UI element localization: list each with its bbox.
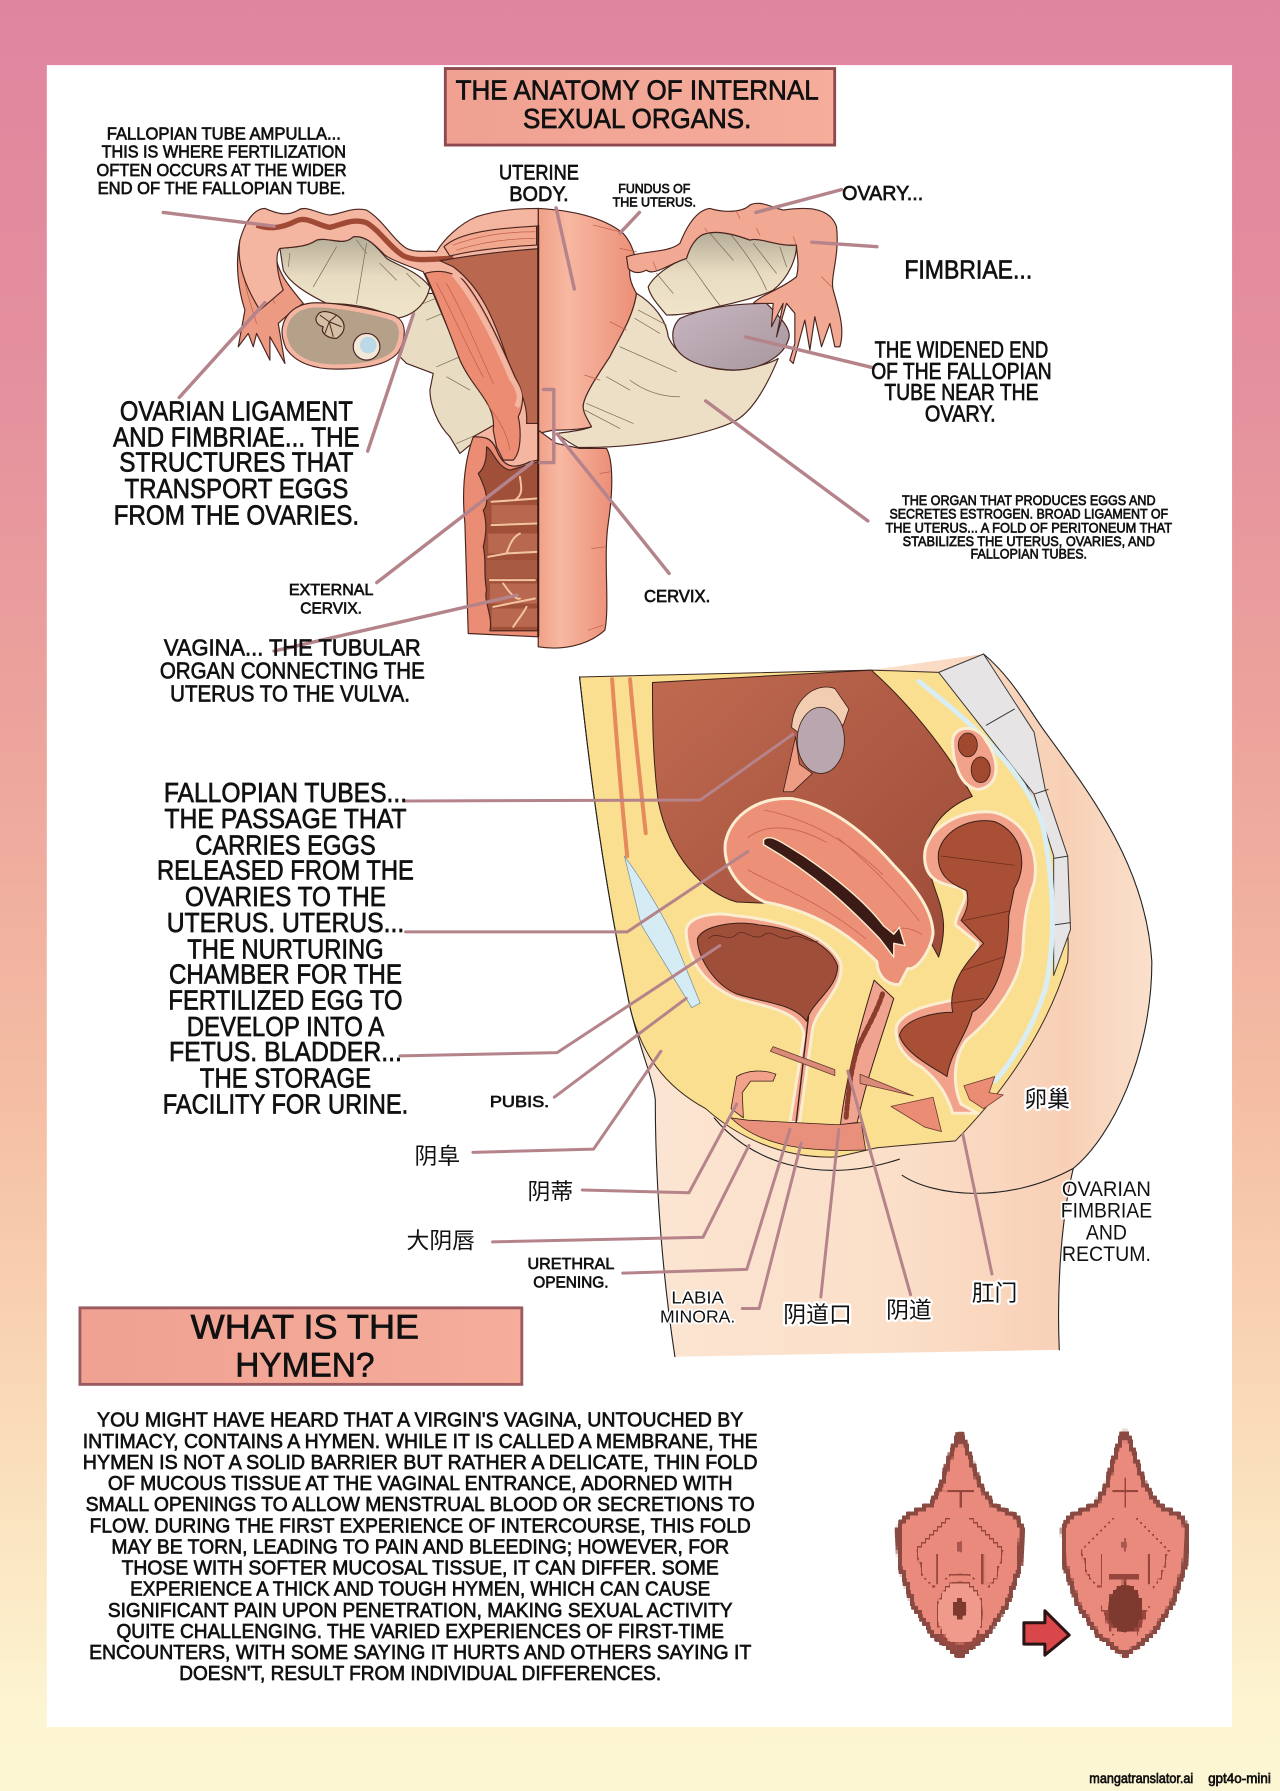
intestine loop <box>953 728 996 789</box>
label: urethral opening: URETHRAL <box>528 1256 614 1273</box>
pale membrane band <box>919 682 1052 1081</box>
label: ovarian fimbriae and rectum <box>1061 1176 1152 1266</box>
label: ovarian ligament and fimbriae: OVARIAN LIGAMENT <box>120 395 353 426</box>
text block: hymen explanation: HYMEN IS NOT A SOLID BARRIER BUT RATHER A DELICATE, THIN FOLD <box>83 1451 758 1474</box>
text block: hymen explanation: QUITE CHALLENGING. THE VARIED EXPERIENCES OF FIRST-TIME <box>116 1620 724 1643</box>
label: ovary: OVARY... <box>842 182 923 205</box>
cut edge <box>535 225 541 637</box>
text block: fallopian tubes, uterus, bladder: FETUS. BLADDER... <box>169 1036 402 1067</box>
external genital section <box>731 1071 866 1150</box>
text block: hymen explanation: THOSE WITH SOFTER MUCOSAL TISSUE, IT CAN DIFFER. SOME <box>122 1557 719 1580</box>
label: fallopian tube ampulla <box>96 123 347 198</box>
blue bladder space <box>624 856 700 1008</box>
vagina wall section <box>464 437 538 637</box>
text block: hymen explanation: MAY BE TORN, LEADING TO PAIN AND BLEEDING; HOWEVER, FOR <box>111 1535 729 1558</box>
wall and tube section <box>239 208 538 466</box>
heading: what is the hymen: WHAT IS THE <box>191 1309 419 1347</box>
heading: what is the hymen: HYMEN? <box>235 1346 375 1384</box>
left ligament wing <box>280 237 430 318</box>
ovary cross-section <box>282 303 404 369</box>
label: ovary and broad ligament note: THE ORGAN THAT PRODUCES EGGS AND <box>902 493 1156 508</box>
vaginal rugae <box>478 447 538 631</box>
label: mons pubis: 阴阜 <box>414 1143 460 1169</box>
diagram: sagittal section of pelvis <box>580 654 1152 1357</box>
label: urethral opening <box>528 1256 614 1291</box>
tube lumen <box>257 219 453 260</box>
cervix bracket <box>540 389 554 463</box>
text block: fallopian tubes, uterus, bladder: FACILITY FOR URINE. <box>163 1089 408 1120</box>
upper uterine wall <box>444 226 537 256</box>
right broad ligament <box>557 293 778 448</box>
title box <box>445 69 835 145</box>
title box: SEXUAL ORGANS. <box>523 103 751 134</box>
label: widened end <box>871 337 1052 426</box>
label: ovarian fimbriae and rectum: AND <box>1086 1219 1127 1244</box>
text block: fallopian tubes, uterus, bladder: OVARIES TO THE <box>185 881 386 912</box>
heading: what is the hymen <box>80 1308 522 1384</box>
uterus section <box>725 798 933 985</box>
label: labia minora <box>660 1287 735 1327</box>
leader lines: sagittal diagram <box>400 734 992 1308</box>
text block: fallopian tubes, uterus, bladder <box>157 777 414 1120</box>
pixelated hymen diagrams <box>900 1434 1185 1653</box>
text block: hymen explanation <box>83 1409 758 1685</box>
label: ovarian ligament and fimbriae: AND FIMBRIAE... THE <box>113 422 360 453</box>
label: ovary (Chinese): 卵巢 <box>1024 1086 1070 1112</box>
label: ovarian ligament and fimbriae <box>113 395 360 530</box>
uterus fold marks <box>585 225 637 630</box>
spine <box>939 654 1070 975</box>
diagram: frontal view, left side (cut section) <box>238 208 538 637</box>
label: vagina: ORGAN CONNECTING THE <box>160 657 425 683</box>
label: fallopian tube ampulla: FALLOPIAN TUBE AMPULLA... <box>107 123 341 143</box>
label: ovary and broad ligament note: STABILIZES THE UTERUS, OVARIES, AND <box>903 534 1155 549</box>
lower body outlines <box>580 654 1152 1357</box>
label: vagina: VAGINA... THE TUBULAR <box>164 635 421 661</box>
footer credits <box>1089 1771 1271 1786</box>
label: urethral opening: OPENING. <box>533 1274 609 1291</box>
text block: fallopian tubes, uterus, bladder: CARRIES EGGS <box>195 829 376 860</box>
ovary and tube <box>783 687 849 792</box>
label: ovary and broad ligament note <box>885 493 1173 562</box>
right tube and fimbriae <box>627 203 842 363</box>
text block: hymen explanation: YOU MIGHT HAVE HEARD THAT A VIRGIN'S VAGINA, UNTOUCHED BY <box>97 1409 744 1432</box>
label: ovarian fimbriae and rectum: RECTUM. <box>1062 1241 1151 1266</box>
text block: fallopian tubes, uterus, bladder: RELEASED FROM THE <box>157 855 414 886</box>
skin body <box>580 654 1152 1357</box>
label: vagina: UTERUS TO THE VULVA. <box>170 680 410 706</box>
label: labia minora: MINORA. <box>660 1307 735 1327</box>
text block: hymen explanation: INTIMACY, CONTAINS A HYMEN. WHILE IT IS CALLED A MEMBRANE, THE <box>83 1430 758 1453</box>
left fimbriae <box>238 240 303 363</box>
label: fallopian tube ampulla: END OF THE FALLOPIAN TUBE. <box>98 178 345 198</box>
footer credits: gpt4o-mini <box>1208 1771 1271 1786</box>
text block: hymen explanation: DOESN'T, RESULT FROM INDIVIDUAL DIFFERENCES. <box>179 1662 661 1685</box>
diagram: frontal view, right side (external) <box>538 203 842 648</box>
bladder <box>686 914 841 1122</box>
label: fundus <box>613 182 696 210</box>
perineum muscles <box>770 1047 913 1096</box>
fat layer <box>580 670 1068 1157</box>
vagina section <box>840 980 894 1125</box>
label: external cervix: EXTERNAL <box>289 582 373 599</box>
label: vagina (Chinese): 阴道 <box>886 1297 932 1323</box>
uterine cavity <box>440 249 538 423</box>
label: pubis: PUBIS. <box>490 1094 549 1111</box>
text block: fallopian tubes, uterus, bladder: CHAMBER FOR THE <box>169 958 402 989</box>
label: uterine body <box>499 159 579 206</box>
label: vagina <box>160 635 425 706</box>
label: ovary and broad ligament note: THE UTERUS... A FOLD OF PERITONEUM THAT <box>885 520 1173 535</box>
text block: fallopian tubes, uterus, bladder: FALLOPIAN TUBES... <box>164 777 407 808</box>
label: fallopian tube ampulla: THIS IS WHERE FERTILIZATION <box>102 142 346 162</box>
text block: hymen explanation: FLOW. DURING THE FIRST EXPERIENCE OF INTERCOURSE, THIS FOLD <box>90 1514 751 1537</box>
text block: hymen explanation: ENCOUNTERS, WITH SOME SAYING IT HURTS AND OTHERS SAYING IT <box>89 1641 752 1664</box>
label: ovarian ligament and fimbriae: FROM THE OVARIES. <box>114 499 359 530</box>
label: external cervix: CERVIX. <box>300 600 362 617</box>
label: uterine body: UTERINE <box>499 159 579 184</box>
text block: hymen explanation: OF MUCOUS TISSUE AT THE VAGINAL ENTRANCE, ADORNED WITH <box>108 1472 732 1495</box>
left lower ligament <box>400 293 497 453</box>
text block: fallopian tubes, uterus, bladder: FERTILIZED EGG TO <box>168 985 402 1016</box>
diagram: after <box>1065 1434 1185 1653</box>
text block: fallopian tubes, uterus, bladder: DEVELOP INTO A <box>187 1011 385 1042</box>
text block: hymen explanation: SMALL OPENINGS TO ALLOW MENSTRUAL BLOOD OR SECRETIONS TO <box>86 1493 755 1516</box>
text block: fallopian tubes, uterus, bladder: THE STORAGE <box>200 1062 371 1093</box>
label: cervix: CERVIX. <box>644 586 710 606</box>
label: ovarian ligament and fimbriae: STRUCTURES THAT <box>119 447 354 478</box>
label: ovarian fimbriae and rectum: FIMBRIAE <box>1061 1198 1152 1223</box>
label: ovarian fimbriae and rectum: OVARIAN <box>1062 1176 1151 1201</box>
label: widened end: THE WIDENED END <box>875 337 1048 363</box>
side muscle band <box>425 271 522 460</box>
label: anus: 肛门 <box>972 1280 1017 1306</box>
label: widened end: TUBE NEAR THE <box>884 379 1039 405</box>
text block: fallopian tubes, uterus, bladder: THE PASSAGE THAT <box>164 803 407 834</box>
label: fimbriae: FIMBRIAE... <box>904 255 1032 285</box>
label: clitoris: 阴蒂 <box>528 1178 573 1204</box>
label: fundus: THE UTERUS. <box>613 196 696 210</box>
label: ovarian ligament and fimbriae: TRANSPORT EGGS <box>124 473 348 504</box>
right ovary <box>673 303 789 370</box>
text block: hymen explanation: EXPERIENCE A THICK AND TOUGH HYMEN, WHICH CAN CAUSE <box>130 1578 710 1601</box>
footer credits: mangatranslator.ai <box>1089 1771 1193 1786</box>
diagram: before <box>900 1437 1020 1653</box>
title box: THE ANATOMY OF INTERNAL <box>456 74 819 105</box>
label: fallopian tube ampulla: OFTEN OCCURS AT THE WIDER <box>96 160 347 180</box>
label: widened end: OVARY. <box>925 400 996 426</box>
icon: red arrow <box>1024 1611 1069 1655</box>
leader lines: upper diagram <box>163 190 877 651</box>
label: uterine body: BODY. <box>509 181 569 206</box>
label: external cervix <box>289 582 373 617</box>
abdominal cavity <box>652 670 972 957</box>
label: fundus: FUNDUS OF <box>618 182 691 196</box>
label: labia majora: 大阴唇 <box>407 1227 475 1253</box>
abdominal wall muscle <box>612 679 646 856</box>
vagina external half <box>538 430 612 648</box>
text block: fallopian tubes, uterus, bladder: THE NURTURING <box>187 933 384 964</box>
label: vaginal opening: 阴道口 <box>783 1302 852 1328</box>
label: widened end: OF THE FALLOPIAN <box>871 358 1052 384</box>
right ligament wing <box>648 232 797 315</box>
rectum <box>896 812 1035 1113</box>
label: ovary and broad ligament note: SECRETES ESTROGEN. BROAD LIGAMENT OF <box>889 507 1168 522</box>
uterus external half <box>538 208 637 433</box>
text block: hymen explanation: SIGNIFICANT PAIN UPON PENETRATION, MAKING SEXUAL ACTIVITY <box>108 1599 733 1622</box>
label: ovary and broad ligament note: FALLOPIAN TUBES. <box>971 547 1087 562</box>
anal sphincter <box>891 1077 1003 1132</box>
label: labia minora: LABIA <box>671 1287 725 1307</box>
text block: fallopian tubes, uterus, bladder: UTERUS. UTERUS... <box>167 907 404 938</box>
